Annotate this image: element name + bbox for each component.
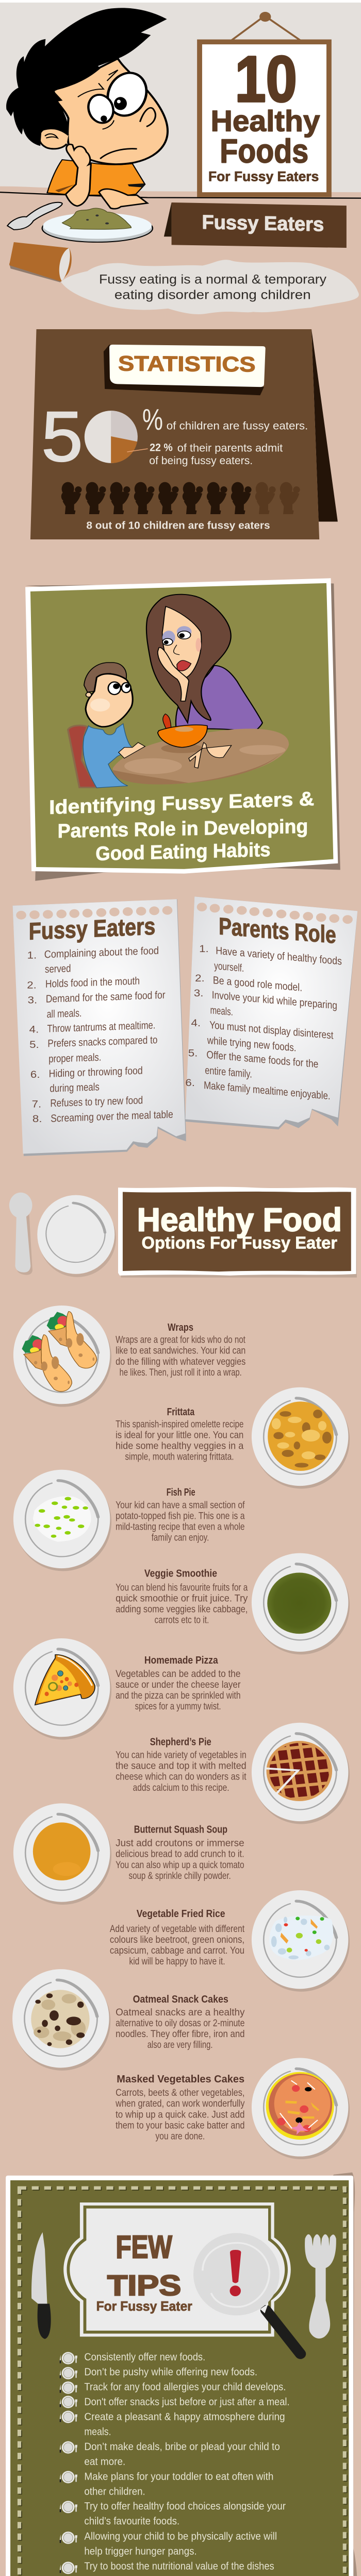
note list: 4.: [191, 1018, 201, 1029]
soup text: Just add croutons or immerse: [116, 1838, 244, 1849]
oatmeal text: alternative to oily dosas or 2-minute: [116, 2018, 245, 2029]
plaque heading: For Fussy Eater: [96, 2299, 192, 2314]
tips list: Track for any food allergies your child develops.: [84, 2381, 286, 2393]
tips panel border: [6, 2176, 353, 2576]
food: Veggie Smoothie: [116, 1553, 350, 1654]
callout text: eating disorder among children: [114, 287, 311, 302]
fork: [7, 202, 62, 230]
rice text: capsicum, cabbage and carrot. You: [110, 1945, 244, 1956]
fish pie text: Fish Pie: [167, 1486, 195, 1498]
note list: [27, 944, 173, 1125]
wraps text: [116, 1321, 245, 1378]
tips list: Don't offer snacks just before or just after a meal.: [84, 2396, 290, 2408]
note list: 1.: [27, 950, 37, 961]
fish pie text: mild-tasting recipe that even a whole: [116, 1521, 245, 1532]
wraps text: Wraps are a great for kids who do not: [116, 1334, 245, 1345]
icon: fork: [305, 2234, 336, 2338]
stat 22 percent text: 22 %: [150, 441, 173, 453]
percent sign: %: [142, 404, 163, 436]
tips list: Try to offer healthy food choices alongside your: [84, 2500, 286, 2512]
note list: 3.: [28, 995, 37, 1006]
note list: all meals.: [47, 1007, 81, 1020]
tips list: Don’t make deals, bribe or plead your child to: [84, 2441, 280, 2452]
top white strip: [0, 0, 361, 3]
statistics label: [104, 345, 266, 395]
panel body: [30, 329, 319, 539]
pie text: cheese which can do wonders as it: [116, 1771, 247, 1782]
plate: [13, 1638, 111, 1740]
tips list: Try to boost the nutritional value of the dishes: [84, 2560, 274, 2572]
bullet icons: [60, 2352, 77, 2574]
rice text: Add variety of vegetable with different: [110, 1923, 244, 1934]
note list: 4.: [29, 1024, 39, 1035]
oatmeal cake illustration: [31, 1990, 90, 2048]
food: Oatmeal Snack Cakes: [12, 1969, 245, 2071]
leader line: [127, 449, 148, 452]
fish pie text: Your kid can have a small section of: [116, 1500, 245, 1511]
icon: magnifying glass with exclamation: [193, 2233, 301, 2354]
tips list: Create a pleasant & happy atmosphere during: [84, 2411, 285, 2422]
note list: 7.: [32, 1099, 41, 1110]
stat 50 percent text: of children are fussy eaters.: [167, 419, 308, 432]
frittata illustration: [268, 1401, 334, 1471]
note list: 2.: [27, 980, 37, 991]
pizza text: and the pizza can be sprinkled with: [116, 1690, 240, 1701]
callout text: [99, 272, 326, 302]
hanging sign with title: [197, 12, 332, 197]
soup illustration: [33, 1822, 90, 1880]
note list: Be a good role model.: [213, 974, 302, 993]
food: Homemade Pizza: [13, 1638, 241, 1740]
rice text: Vegetable Fried Rice: [137, 1908, 225, 1920]
fish pie illustration: [33, 1496, 91, 1541]
oatmeal text: [116, 1993, 245, 2050]
callout text: Fussy eating is a normal & temporary: [99, 272, 326, 286]
food: Shepherd's Pie: [116, 1723, 350, 1824]
note: parents role: [185, 896, 357, 1129]
soup text: soup & sprinkle chilly powder.: [129, 1870, 231, 1881]
tips list: Allowing your child to be physically active will: [84, 2530, 277, 2542]
note list: Demand for the same food for: [46, 989, 166, 1005]
fish pie text: family can enjoy.: [152, 1532, 209, 1543]
fish pie text: potato-topped fish pie. This one is a: [116, 1511, 245, 1521]
tips list: meals.: [84, 2426, 111, 2437]
fish pie text: [116, 1486, 245, 1543]
pictogram: 8 of 10 children: [61, 482, 300, 514]
rice text: kid will be happy to have it.: [129, 1956, 225, 1967]
plate: [13, 1803, 111, 1905]
note list: proper meals.: [48, 1051, 101, 1065]
title word Healthy: Healthy: [210, 105, 320, 138]
big number 5: 5: [41, 397, 83, 476]
photo caption: Good Eating Habits: [95, 838, 271, 865]
plate: [13, 1470, 111, 1571]
pie text: Shepherd’s Pie: [150, 1736, 211, 1748]
note list: Complaining about the food: [44, 944, 159, 960]
cake text: you are done.: [155, 2131, 205, 2142]
wraps text: like to eat sandwiches. Your kid can: [116, 1345, 245, 1356]
photo shadow: [25, 583, 340, 881]
plaque heading: [96, 2229, 192, 2314]
stitched border: [19, 2188, 346, 2576]
tips panel shadow: [4, 2173, 357, 2576]
cake text: [115, 2073, 245, 2142]
note list: Throw tantrums at mealtime.: [47, 1019, 155, 1035]
table edge line: [0, 192, 361, 198]
soup text: [116, 1823, 244, 1881]
photo background: [30, 583, 333, 869]
plaque heading: TIPS: [107, 2269, 181, 2301]
cake text: to whip up a quick cake. Just add: [116, 2109, 245, 2120]
wraps text: do the filling with whatever veggies: [116, 1356, 245, 1367]
note list: 5.: [29, 1040, 39, 1050]
sign: Fussy Eaters: Fussy Eaters: [202, 211, 324, 235]
plate with rejected food: [42, 208, 153, 242]
panel: few tips: [4, 2173, 357, 2576]
tips panel background: [10, 2180, 349, 2576]
sign: Fussy Eaters: [164, 202, 347, 248]
plate: [12, 1969, 110, 2071]
pie text: [116, 1736, 247, 1793]
note list: 5.: [188, 1048, 198, 1059]
icon: knife: [31, 2232, 51, 2339]
note list: Holds food in the mouth: [45, 975, 140, 990]
note list: 1.: [199, 943, 209, 954]
oatmeal text: Oatmeal Snack Cakes: [133, 1993, 228, 2005]
plate: [252, 2058, 350, 2159]
soup text: Butternut Squash Soup: [134, 1823, 227, 1835]
cake text: Masked Vegetables Cakes: [117, 2073, 244, 2085]
rice illustration: [269, 1916, 333, 1960]
wall: [0, 3, 361, 200]
note list: Prefers snacks compared to: [47, 1034, 157, 1049]
cake illustration: [266, 2072, 334, 2140]
photo white border: [25, 578, 338, 874]
note list: while trying new foods.: [207, 1034, 297, 1054]
note list: Hiding or throwing food: [49, 1064, 143, 1079]
wraps text: he likes. Then, just roll it into a wrap.: [120, 1367, 242, 1378]
pie chart: [85, 411, 138, 463]
wraps illustration: [22, 1311, 97, 1392]
food: Butternut Squash Soup: [13, 1803, 244, 1905]
note list: Refuses to try new food: [50, 1094, 143, 1109]
tips list: eat more.: [84, 2455, 125, 2467]
photo caption: Parents Role in Developing: [58, 815, 308, 842]
tipped glass: [9, 242, 72, 282]
statistics label: STATISTICS: [118, 351, 256, 377]
plate: [252, 1723, 350, 1824]
section: healthy food options and foods: [9, 1187, 357, 2159]
icon: empty plate: [37, 1195, 116, 1277]
oatmeal text: also are very filling.: [147, 2040, 212, 2050]
icon: spoon: [9, 1193, 32, 1275]
note list: served: [45, 962, 71, 975]
tips list: Consistently offer new foods.: [84, 2351, 205, 2363]
pizza text: [116, 1654, 241, 1712]
note heading: Fussy Eaters: [29, 912, 155, 945]
tips list: other children.: [84, 2485, 145, 2497]
photo caption: [49, 787, 314, 865]
smoothie text: [116, 1567, 248, 1625]
note list: Screaming over the meal table: [51, 1108, 173, 1124]
note list: Offer the same foods for the: [206, 1048, 318, 1070]
note list: 3.: [194, 988, 203, 999]
note list: 6.: [185, 1078, 195, 1089]
illustration: mother and child at table: [68, 595, 289, 788]
rice text: colours like beetroot, green onions,: [110, 1934, 244, 1945]
title subtitle: For Fussy Eaters: [208, 169, 319, 184]
note list: entire family.: [205, 1064, 252, 1080]
pie text: the sauce and top it with melted: [116, 1760, 247, 1771]
photo caption: Identifying Fussy Eaters &: [49, 787, 314, 818]
stat 22 percent text: of being fussy eaters.: [149, 454, 253, 467]
tips list: Make plans for your toddler to eat often with: [84, 2470, 273, 2482]
soup text: delicious bread to add crunch to it.: [116, 1849, 244, 1859]
cake text: Carrots, beets & other vegetables,: [116, 2088, 245, 2098]
frittata text: Frittata: [167, 1406, 195, 1418]
note list: 8.: [32, 1114, 42, 1125]
tips list: [84, 2351, 290, 2576]
smoothie illustration: [267, 1573, 331, 1634]
smoothie text: You can blend his favourite fruits for a: [116, 1582, 248, 1593]
pizza text: spices for a yummy twist.: [135, 1701, 221, 1712]
frittata text: simple, mouth watering frittata.: [125, 1451, 234, 1462]
frittata text: hide some healthy veggies in a: [116, 1440, 244, 1451]
note list: [185, 943, 342, 1102]
food: Vegetable Fried Rice: [110, 1890, 350, 1992]
panel: statistics: [30, 329, 338, 539]
stat 22 percent text: [149, 441, 283, 467]
wraps text: Wraps: [168, 1321, 193, 1333]
panels: torn notes: [13, 896, 357, 1156]
smoothie text: carrots etc to it.: [155, 1615, 209, 1625]
oatmeal text: noodles. They offer fibre, iron and: [116, 2029, 245, 2040]
pizza text: Homemade Pizza: [144, 1654, 219, 1666]
frittata text: is ideal for your little one. You can: [116, 1430, 243, 1440]
title number: 10: [235, 43, 297, 116]
spilled milk callout: [61, 260, 359, 314]
panel: identifying fussy eaters photo: [25, 578, 340, 881]
note list: 2.: [195, 973, 205, 984]
cake text: when grated, can work wonderfully: [115, 2098, 245, 2109]
plate: [252, 1553, 350, 1654]
frittata text: This spanish-inspired omelette recipe: [116, 1419, 243, 1430]
tips plaque: [63, 2202, 301, 2354]
pizza illustration: [35, 1655, 95, 1705]
tips list: child’s favourite foods.: [84, 2515, 179, 2527]
food: Masked Vegetables Cakes: [115, 2058, 350, 2159]
cake text: them to your basic cake batter and: [116, 2120, 245, 2131]
binder holes: [197, 903, 353, 924]
note list: meals.: [210, 1004, 233, 1018]
pie illustration: [266, 1741, 332, 1801]
note list: yourself.: [214, 960, 244, 974]
binder holes: [16, 906, 172, 920]
smoothie text: quick smoothie or fruit juice. Try: [116, 1593, 248, 1604]
pictogram caption: 8 out of 10 children are fussy eaters: [86, 519, 270, 531]
smoothie text: Veggie Smoothie: [144, 1567, 217, 1579]
food: Wraps: [13, 1306, 245, 1407]
smoothie text: adding some veggies like cabbage,: [116, 1604, 248, 1615]
food: Frittata: [116, 1387, 350, 1488]
note list: 6.: [30, 1069, 40, 1080]
panel fold shadow: [311, 329, 338, 522]
header scene: [0, 3, 361, 324]
food: Fish Pie: [13, 1470, 245, 1571]
title word Foods: Foods: [220, 132, 308, 170]
pizza text: sauce or under the cheese layer: [116, 1679, 241, 1690]
plate: [252, 1387, 350, 1488]
pie text: You can hide variety of vegetables in: [116, 1750, 247, 1760]
plate: [252, 1890, 350, 1992]
tips list: help trigger hunger pangs.: [84, 2545, 197, 2557]
illustration: sulking boy: [6, 8, 168, 209]
pizza text: Vegetables can be added to the: [116, 1668, 240, 1680]
plate: [13, 1306, 111, 1407]
soup text: You can also whip up a quick tomato: [116, 1859, 244, 1870]
note list: during meals: [50, 1081, 100, 1094]
stat 22 percent text: of their parents admit: [177, 442, 283, 454]
table surface: [0, 187, 361, 324]
tips list: Don’t be pushy while offering new foods.: [84, 2366, 257, 2378]
note: fussy eaters: [13, 899, 186, 1156]
plaque heading: FEW: [116, 2229, 172, 2265]
frittata text: [116, 1406, 244, 1462]
rice text: [110, 1908, 244, 1967]
oatmeal text: Oatmeal snacks are a healthy: [116, 2007, 245, 2018]
banner: healthy food options: [118, 1187, 357, 1278]
pie text: adds calcium to this recipe.: [133, 1782, 229, 1793]
